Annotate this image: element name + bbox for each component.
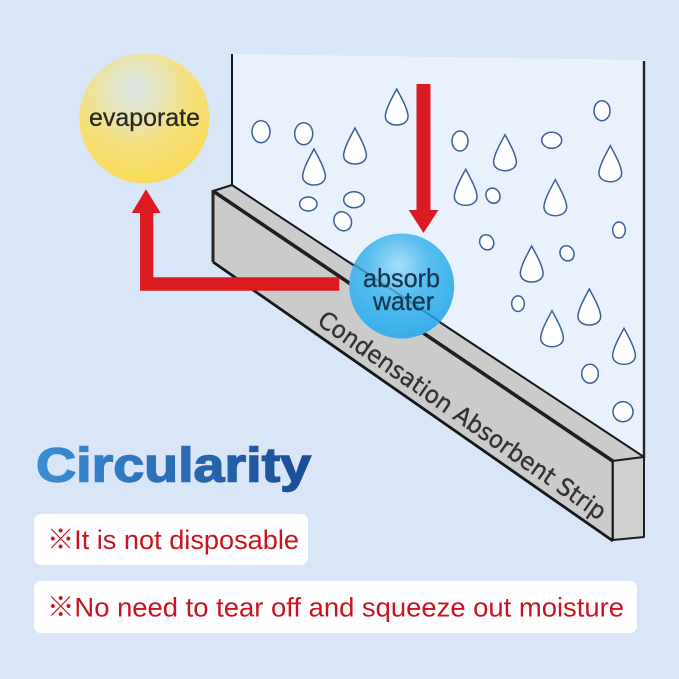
note box: no need to tear off: ※No need to tear off and squeeze out moisture xyxy=(47,592,624,622)
evaporate circle xyxy=(79,53,209,183)
condensation absorbent strip xyxy=(213,185,644,541)
arrow: red L-shaped arrow up to evaporate circle xyxy=(132,189,339,291)
note box: no need to tear off xyxy=(34,581,637,633)
arrow: red down arrow into absorb circle xyxy=(409,84,438,233)
absorb water circle xyxy=(349,234,454,338)
strip label: Condensation Absorbent Strip xyxy=(313,305,612,526)
window glass panel xyxy=(232,54,644,458)
title: Circularity: Circularity xyxy=(36,440,311,493)
note box: not disposable xyxy=(34,514,308,565)
note box: not disposable: ※It is not disposable xyxy=(47,525,299,555)
evaporate label: evaporate xyxy=(89,104,200,132)
absorb water label: water xyxy=(372,286,434,316)
absorb water label: absorb xyxy=(363,263,440,293)
water droplets on glass xyxy=(252,89,637,425)
